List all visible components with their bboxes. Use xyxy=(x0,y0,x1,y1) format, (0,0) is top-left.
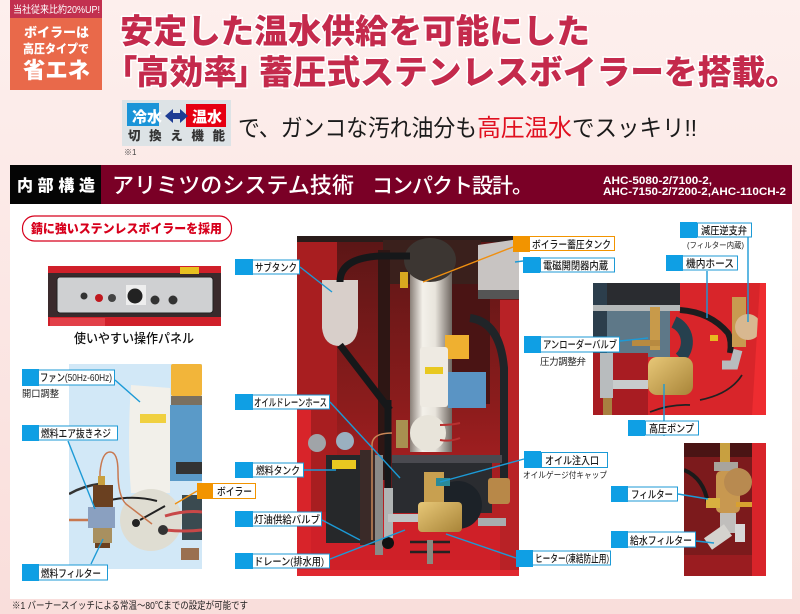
header band: コンパクト設計。 xyxy=(372,175,533,198)
photo: filter close-up xyxy=(684,443,766,576)
callout: ボイラー: ボイラー xyxy=(217,486,252,498)
title: 高効率 xyxy=(136,55,237,92)
callout: 高圧ポンプ xyxy=(628,420,698,436)
callout: 高圧ポンプ: 高圧ポンプ xyxy=(649,422,694,435)
header band xyxy=(10,165,792,204)
caption: control panel: 使いやすい操作パネル xyxy=(74,331,194,346)
callout: 減圧逆支弁: 減圧逆支弁 xyxy=(701,224,747,237)
yellow box xyxy=(445,335,469,359)
callout: 電磁開閉器内蔵 xyxy=(523,257,614,273)
right valve xyxy=(488,478,510,504)
note: オイルゲージ付キャップ: オイルゲージ付キャップ xyxy=(523,470,607,480)
pill heading: 錆に強いステンレスボイラーを採用 xyxy=(31,221,222,236)
pump xyxy=(418,502,462,532)
header band: アリミツのシステム技術 xyxy=(112,173,354,198)
fuel tank xyxy=(326,455,360,543)
white content panel xyxy=(10,204,792,599)
heater xyxy=(410,542,450,552)
note mark: ※1 xyxy=(124,148,137,157)
callout: ボイラー蓄圧タンク: ボイラー蓄圧タンク xyxy=(532,238,611,251)
header band: AHC-5080-2/7100-2, xyxy=(603,175,712,187)
callout: ボイラー蓄圧タンク xyxy=(513,236,614,252)
note: 開口調整: 開口調整 xyxy=(22,388,59,400)
burner disk xyxy=(410,415,446,451)
subtitle: 高圧温水 xyxy=(477,115,572,142)
callout: 機内ホース: 機内ホース xyxy=(686,257,734,270)
callout: オイル注入口 xyxy=(524,451,608,468)
badge: energy saving: ボイラーは xyxy=(24,25,89,40)
footnote: ※1 バーナースイッチによる常温～80℃までの設定が可能です xyxy=(12,599,248,612)
callout: 燃料エア抜きネジ: 燃料エア抜きネジ xyxy=(41,427,111,440)
callout: 給水フィルター: 給水フィルター xyxy=(630,534,692,547)
badge: energy saving: 省エネ xyxy=(23,58,90,83)
callout: ボイラー xyxy=(197,483,256,499)
callout: アンローダーバルブ: アンローダーバルブ xyxy=(543,338,617,351)
note: 圧力調整弁: 圧力調整弁 xyxy=(540,356,586,368)
callout: ヒーター(凍結防止用): ヒーター(凍結防止用) xyxy=(535,552,609,565)
subtitle: でスッキリ!! xyxy=(572,115,697,141)
callout: オイルドレーンホース: オイルドレーンホース xyxy=(254,397,327,409)
callout: ファン: ファン(50Hz-60Hz) xyxy=(40,372,112,384)
subtitle xyxy=(238,115,697,142)
photo: burner xyxy=(69,364,202,569)
callout: 減圧逆支弁 xyxy=(680,222,752,238)
header band: AHC-7150-2/7200-2,AHC-110CH-2 xyxy=(603,186,786,198)
pulley xyxy=(444,481,482,529)
badge: energy saving: 高圧タイプで xyxy=(23,41,89,56)
leader lines xyxy=(68,237,748,564)
callout: 機内ホース xyxy=(666,255,738,271)
title: 蓄圧式ステンレスボイラーを搭載。 xyxy=(259,55,799,92)
callout: サブタンク xyxy=(235,259,300,275)
callout: アンローダーバルブ xyxy=(524,336,620,353)
callout: フィルター xyxy=(611,486,678,502)
callout: 燃料エア抜きネジ xyxy=(22,425,118,441)
callout: 燃料タンク: 燃料タンク xyxy=(256,464,300,477)
badge: energy saving xyxy=(10,0,102,90)
icon: cold/hot water switch: 温水 xyxy=(192,108,222,126)
header band: 内部構造 xyxy=(17,176,95,195)
icon: cold/hot water switch: 切換え機能 xyxy=(128,128,225,143)
icon: cold/hot water switch xyxy=(122,100,231,146)
icon: cold/hot water switch: 冷水 xyxy=(132,108,162,126)
frame xyxy=(392,455,502,463)
callout: オイルドレーンホース xyxy=(235,394,330,410)
callout: サブタンク: サブタンク xyxy=(255,261,297,274)
pill heading xyxy=(22,216,232,241)
callout: 電磁開閉器内蔵: 電磁開閉器内蔵 xyxy=(543,259,608,272)
boiler tank xyxy=(410,272,452,452)
pipes xyxy=(384,488,393,538)
callout: ドレーン(排水用) xyxy=(235,553,330,569)
title: 」 xyxy=(234,55,268,92)
callout: 給水フィルター xyxy=(611,531,696,548)
title: 安定した温水供給を可能にした xyxy=(120,14,590,51)
sub tank xyxy=(322,280,358,346)
callout: 灯油供給バルブ xyxy=(235,511,322,527)
fan and motor xyxy=(420,347,448,407)
electric box xyxy=(478,240,519,290)
badge: energy saving: 当社従来比約20%UP! xyxy=(13,3,100,16)
photo: control panel xyxy=(48,266,221,326)
callout: ドレーン(排水用): ドレーン(排水用) xyxy=(254,555,324,568)
subtitle: で、ガンコな汚れ油分も xyxy=(238,115,477,141)
title: 「 xyxy=(104,55,138,92)
callout: 燃料フィルター xyxy=(22,564,108,581)
callout: 燃料タンク xyxy=(235,462,304,478)
hoses xyxy=(340,256,410,282)
callout: ヒーター(凍結防止用) xyxy=(516,550,610,567)
photo: pump close-up xyxy=(593,283,766,415)
callout: 燃料フィルター: 燃料フィルター xyxy=(41,567,101,580)
photo: machine interior xyxy=(297,236,519,576)
note: フィルター内蔵: (フィルター内蔵) xyxy=(687,240,744,250)
callout: フィルター: フィルター xyxy=(631,489,673,501)
title xyxy=(104,14,799,92)
callout: 灯油供給バルブ: 灯油供給バルブ xyxy=(254,513,320,526)
callout: オイル注入口: オイル注入口 xyxy=(545,454,599,467)
callout: ファン xyxy=(22,369,114,386)
